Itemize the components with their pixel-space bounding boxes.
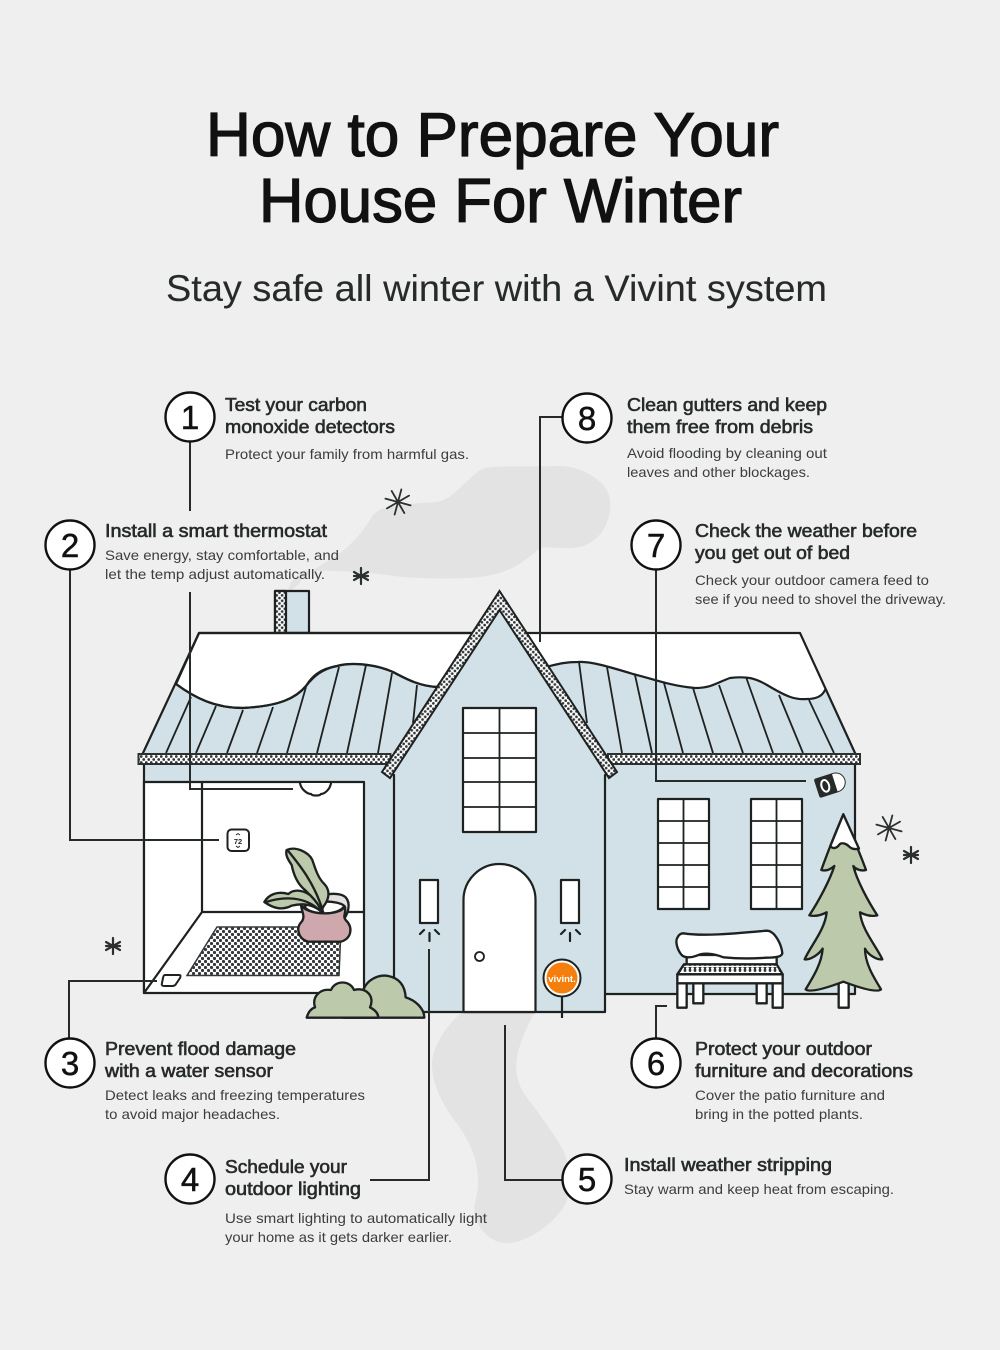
callout 3: with a water sensor bbox=[104, 1061, 273, 1081]
callout 7: see if you need to shovel the driveway. bbox=[695, 591, 946, 607]
callout 1: 1 bbox=[181, 399, 199, 436]
callout 5: Stay warm and keep heat from escaping. bbox=[624, 1181, 894, 1197]
callout 2: Save energy, stay comfortable, and bbox=[105, 547, 339, 563]
callout 2: let the temp adjust automatically. bbox=[105, 566, 325, 582]
callout 6 bbox=[632, 1038, 913, 1122]
callout 4: Schedule your bbox=[225, 1157, 347, 1177]
callout 5: Install weather stripping bbox=[624, 1155, 832, 1175]
callout 7: 7 bbox=[647, 527, 665, 564]
callout line 2 bbox=[70, 570, 219, 840]
callout line 8 bbox=[540, 417, 562, 642]
plant bbox=[264, 849, 350, 942]
title bbox=[206, 101, 779, 236]
low leaf midrib bbox=[265, 898, 321, 912]
snowflakes bbox=[106, 486, 918, 954]
low leaf bbox=[264, 891, 322, 912]
thermostat bbox=[228, 830, 249, 851]
callout 4: Use smart lighting to automatically light bbox=[225, 1210, 487, 1226]
tree bbox=[805, 814, 882, 1008]
left roof bbox=[143, 633, 480, 753]
callout 8: them free from debris bbox=[627, 417, 813, 437]
callout 7: Check the weather before bbox=[695, 521, 917, 541]
callout 6: 6 bbox=[647, 1045, 665, 1082]
callout 4: your home as it gets darker earlier. bbox=[225, 1229, 452, 1245]
bench bbox=[676, 931, 783, 1008]
callout line 4 bbox=[370, 949, 429, 1180]
callout 5 bbox=[562, 1154, 894, 1204]
camera bbox=[814, 770, 848, 798]
tall leaf midrib bbox=[287, 850, 323, 913]
subtitle: Stay safe all winter with a Vivint system bbox=[166, 268, 827, 309]
callout 3 bbox=[46, 1038, 365, 1122]
fascia bbox=[138, 754, 860, 764]
callout 1: Protect your family from harmful gas. bbox=[225, 446, 469, 462]
callout 6: furniture and decorations bbox=[695, 1061, 913, 1081]
callout 2: Install a smart thermostat bbox=[105, 521, 327, 541]
callout 8: Clean gutters and keep bbox=[627, 395, 827, 415]
right windows bbox=[658, 799, 802, 909]
callout 7: you get out of bed bbox=[695, 543, 850, 563]
callout 7: Check your outdoor camera feed to bbox=[695, 572, 929, 588]
vivint sign bbox=[544, 960, 580, 1018]
chimney bbox=[275, 591, 309, 633]
callout 8: Avoid flooding by cleaning out bbox=[627, 445, 827, 461]
water sensor bbox=[162, 975, 181, 986]
callout 1: monoxide detectors bbox=[225, 417, 395, 437]
callout line 1 bbox=[190, 442, 293, 789]
callout 2 bbox=[46, 520, 339, 582]
gable trim bbox=[382, 591, 617, 778]
callout 3: Prevent flood damage bbox=[105, 1039, 296, 1059]
callout 6: bring in the potted plants. bbox=[695, 1106, 863, 1122]
callout 3: to avoid major headaches. bbox=[105, 1106, 280, 1122]
callout 2: 2 bbox=[61, 527, 79, 564]
tree snow bbox=[830, 814, 859, 849]
callout line 6 bbox=[656, 1006, 667, 1038]
callout 5: 5 bbox=[578, 1161, 596, 1198]
callout 4: 4 bbox=[181, 1161, 199, 1198]
room interior bbox=[144, 782, 364, 993]
smoke detector bbox=[300, 783, 331, 796]
callout 6: Cover the patio furniture and bbox=[695, 1087, 885, 1103]
callout 3: Detect leaks and freezing temperatures bbox=[105, 1087, 365, 1103]
title: How to Prepare Your bbox=[206, 101, 779, 170]
callout 3: 3 bbox=[61, 1045, 79, 1082]
rug bbox=[187, 927, 341, 976]
vivint sign: vivint. bbox=[548, 974, 576, 985]
pot back bbox=[305, 894, 349, 920]
foliage bbox=[805, 814, 882, 991]
house walls bbox=[144, 608, 855, 1012]
callout 6: Protect your outdoor bbox=[695, 1039, 872, 1059]
callout 8: 8 bbox=[578, 400, 596, 437]
callout 7 bbox=[632, 520, 946, 607]
house bbox=[138, 591, 882, 1018]
title: House For Winter bbox=[259, 167, 742, 236]
trunk bbox=[839, 982, 849, 1008]
callout 4 bbox=[166, 1154, 487, 1245]
callout 1 bbox=[166, 392, 469, 462]
pot body bbox=[298, 905, 350, 942]
thermostat: 72 bbox=[234, 837, 242, 846]
upper smoke shape bbox=[285, 466, 610, 600]
center window bbox=[463, 708, 536, 832]
bushes bbox=[307, 976, 424, 1018]
sidelights and lights bbox=[420, 880, 580, 941]
callout line 3 bbox=[69, 981, 157, 1038]
right roof bbox=[527, 633, 855, 753]
pot opening bbox=[304, 902, 344, 914]
door bbox=[464, 864, 536, 1012]
callout 8: leaves and other blockages. bbox=[627, 464, 810, 480]
callout 4: outdoor lighting bbox=[225, 1179, 361, 1199]
tall leaf bbox=[286, 849, 328, 913]
callout line 7 bbox=[656, 570, 806, 781]
callout line 5 bbox=[505, 1025, 562, 1180]
callout 1: Test your carbon bbox=[225, 395, 367, 415]
lower smoke shape bbox=[432, 1012, 570, 1243]
callout 8 bbox=[562, 394, 827, 480]
